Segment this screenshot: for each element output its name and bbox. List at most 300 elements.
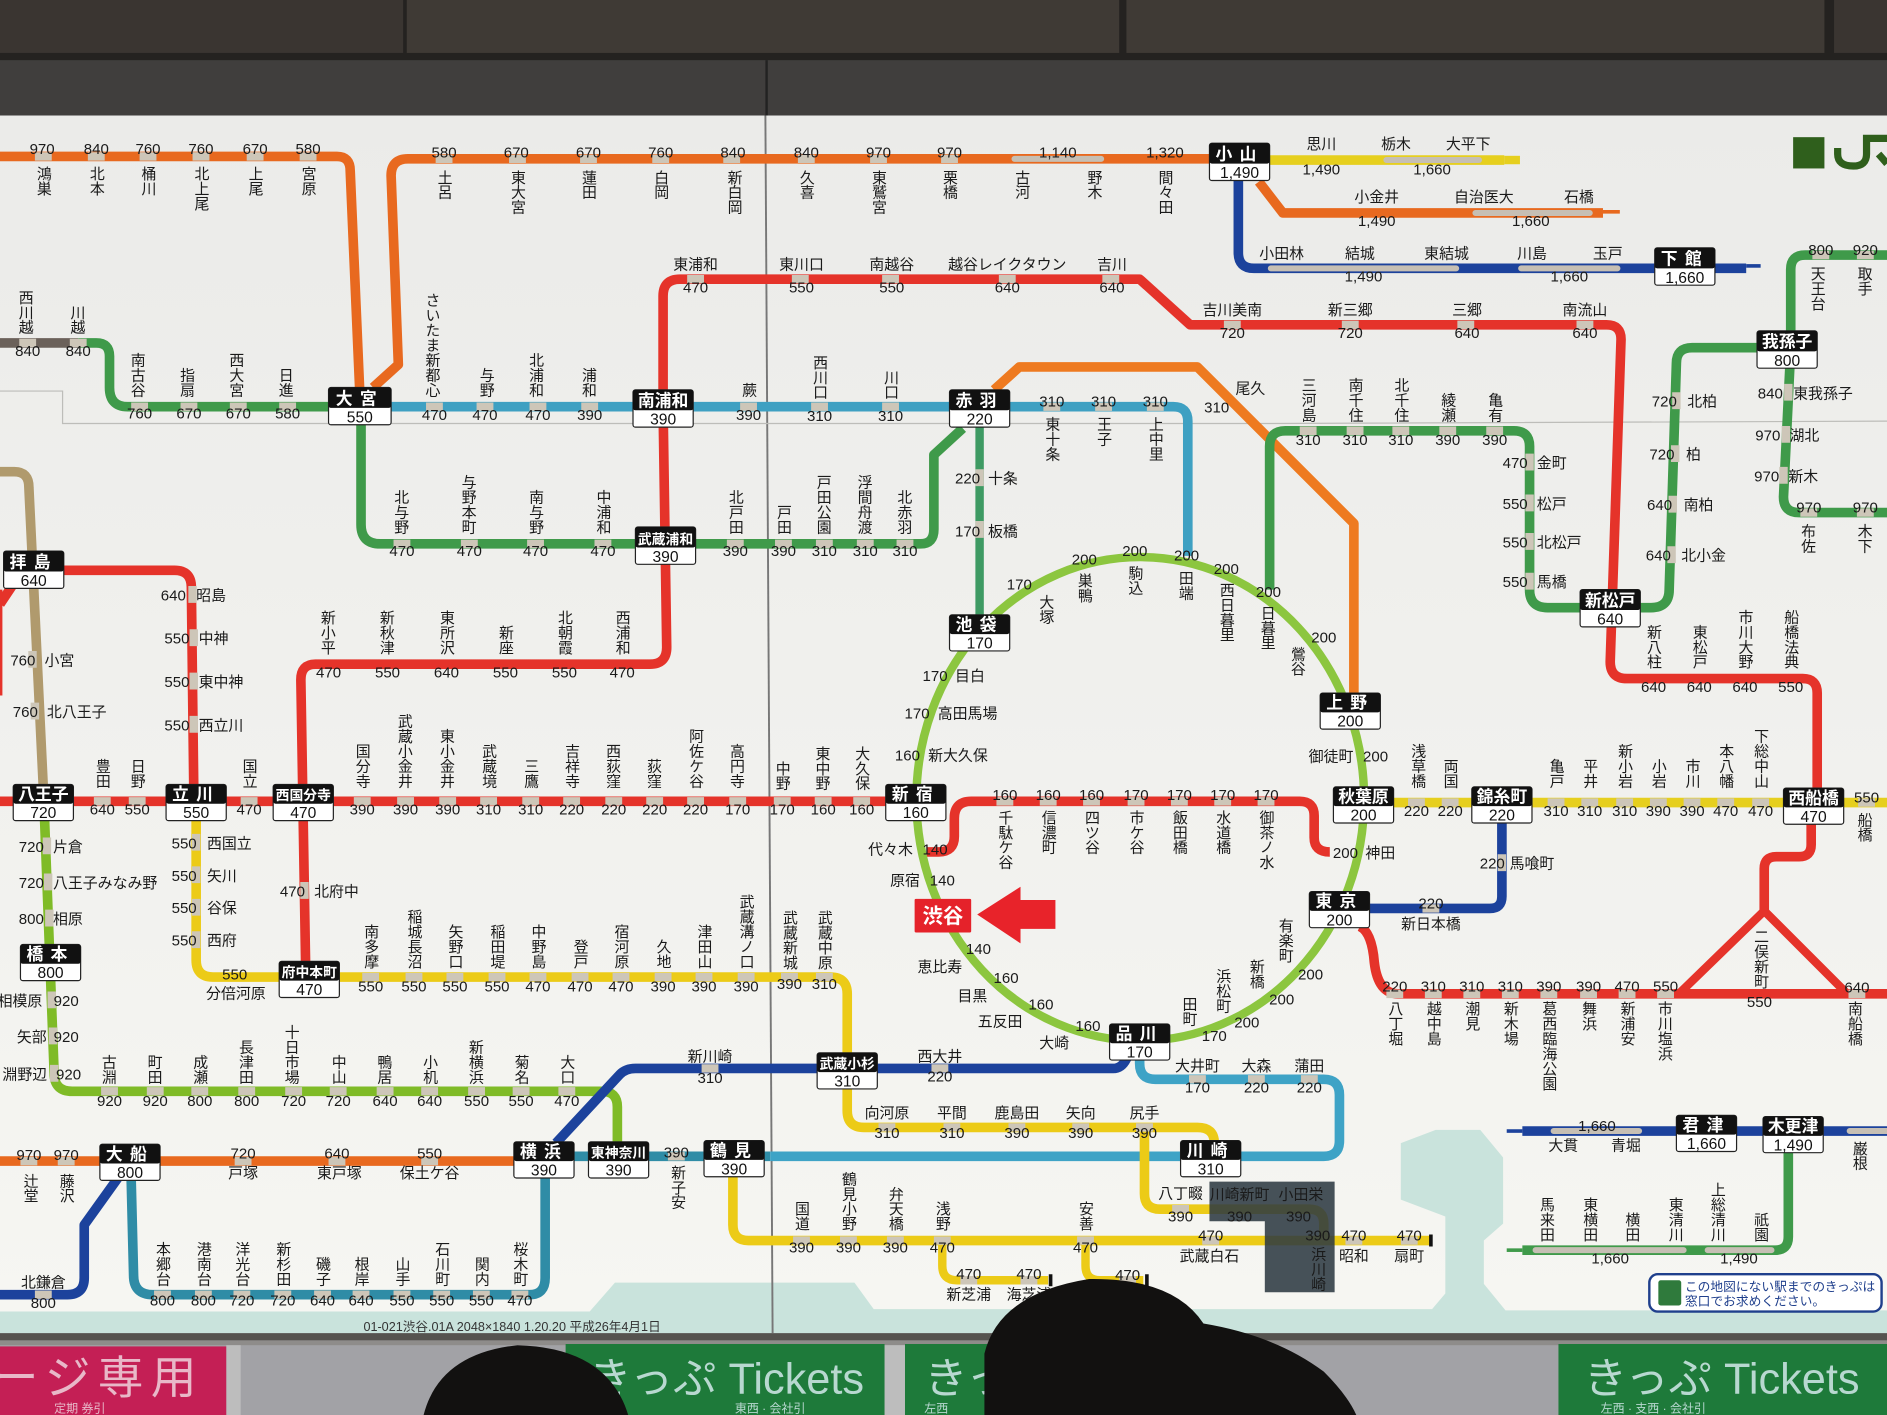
names: Sobu rapid: 馬喰町 bbox=[1510, 856, 1554, 873]
fares: Musashino south and Chuo: 160 bbox=[1079, 787, 1104, 804]
names: Musashino south and Chuo: 本八幡 bbox=[1717, 743, 1734, 788]
line: Keiyo bbox=[1360, 926, 1887, 994]
you-are-here: Shibuya sign bbox=[915, 899, 971, 933]
fares: 640 bbox=[310, 1293, 335, 1310]
names above lines: 中山 bbox=[330, 1054, 347, 1084]
fares: 640 bbox=[1844, 980, 1869, 997]
names: Ryomo, Mito, Mito branch: 川島 bbox=[1517, 246, 1547, 263]
heads in foreground bbox=[424, 1279, 1356, 1415]
fares: vertical stations: 970 bbox=[1796, 500, 1821, 517]
fares: 470 bbox=[930, 1240, 955, 1257]
fares: Musashino north: 550 bbox=[879, 279, 904, 296]
notice box: 窓口でお求めください。 bbox=[1685, 1294, 1825, 1309]
names: Musashino north bbox=[673, 257, 1607, 397]
names: west vertical: 片倉 bbox=[53, 839, 83, 856]
line: Keihin-Tohoku to Shinagawa bbox=[770, 1053, 1339, 1156]
fares: 310 bbox=[1459, 978, 1484, 995]
names horizontal bbox=[1548, 1137, 1641, 1154]
fares: Musashino south and Chuo: 550 bbox=[1778, 679, 1803, 696]
fares: 390 bbox=[1068, 1125, 1093, 1142]
station: Higashi-Kanagawa bbox=[588, 1142, 649, 1180]
line: Joban north bbox=[1784, 255, 1887, 513]
fares below lines: 840 bbox=[15, 343, 40, 360]
station: Haijima: 拝島 bbox=[10, 553, 58, 572]
fares: Musashino south and Chuo: 220 bbox=[1418, 895, 1443, 912]
station: Minami-Urawa: 南浦和 bbox=[638, 391, 688, 411]
fares: 470 bbox=[1073, 1240, 1098, 1257]
fares: Musashino south and Chuo: 160 bbox=[849, 802, 874, 819]
fares: 310 bbox=[1498, 978, 1523, 995]
names: Yamanote horizontal: 目白 bbox=[955, 668, 985, 685]
names above lines: 三河島 bbox=[1300, 378, 1317, 423]
names above lines bbox=[100, 894, 833, 1085]
fares: Musashino south and Chuo: 640 bbox=[434, 664, 459, 681]
names: Takasaki and Utsunomiya: 東大宮 bbox=[509, 170, 526, 215]
names: Yamanote horizontal: 御徒町 bbox=[1309, 749, 1353, 766]
names above lines: 南多摩 bbox=[362, 924, 379, 969]
arrow: pointing to Shibuya bbox=[977, 887, 1055, 943]
names horizontal: 大貫 bbox=[1548, 1137, 1578, 1154]
names: west vertical: 淵野辺 bbox=[2, 1066, 47, 1083]
names: vertical stations bbox=[988, 385, 1853, 591]
names above lines: 北与野 bbox=[392, 489, 409, 534]
names: Ryomo, Mito, Mito branch: 小田林 bbox=[1259, 246, 1304, 263]
names horizontal: 蒲田 bbox=[1294, 1058, 1324, 1075]
names: Takasaki and Utsunomiya: 東鷲宮 bbox=[870, 170, 887, 215]
fares: Musashino south and Chuo: 470 bbox=[1748, 803, 1773, 820]
fares: Yamanote: 170 bbox=[923, 668, 948, 685]
fares below lines: 390 bbox=[736, 407, 761, 424]
fares: Yamanote: 170 bbox=[904, 705, 930, 722]
fares: Takasaki: 840 bbox=[84, 141, 109, 158]
station: Hashimoto: 橋本 bbox=[26, 945, 75, 964]
names: Musashino north: 吉川 bbox=[1097, 257, 1127, 274]
names above Kururi: 祇園 bbox=[1752, 1212, 1769, 1242]
fares: west vertical: 800 bbox=[19, 911, 44, 928]
station: Shin-Matsudo: 新松戸 bbox=[1585, 591, 1635, 610]
fares: Yamanote: 200 bbox=[1333, 845, 1358, 862]
fares: 640 bbox=[417, 1093, 442, 1110]
fares: west vertical bbox=[10, 587, 305, 1083]
fares: 720 bbox=[270, 1293, 295, 1310]
names: Takasaki and Utsunomiya: 久喜 bbox=[798, 170, 815, 200]
fares: Musashino south and Chuo: 550 bbox=[552, 664, 577, 681]
fares: Musashino south and Chuo: 170 bbox=[1167, 787, 1192, 804]
names horizontal: 八丁畷 bbox=[1158, 1185, 1203, 1202]
station: Ofuna: 大船 bbox=[106, 1145, 154, 1164]
fares: vertical stations: 720 bbox=[1652, 394, 1677, 411]
fares: 550 bbox=[1747, 994, 1772, 1011]
names: Musashino south and Chuo: 下総中山 bbox=[1752, 728, 1769, 788]
names vertical: 巌根 bbox=[1851, 1141, 1868, 1171]
fares: west vertical: 760 bbox=[13, 704, 38, 721]
names below Akabane: 東十条 bbox=[1043, 416, 1060, 461]
names: west vertical: 西立川 bbox=[199, 717, 243, 734]
station: Kinshicho: 220 bbox=[1489, 808, 1515, 825]
names above lines: さいたま新都心 bbox=[424, 293, 441, 397]
fares: vertical stations: 800 bbox=[1808, 242, 1833, 259]
sign: green Tickets centre bbox=[566, 1344, 885, 1415]
fares: Yamanote: 200 bbox=[1234, 1015, 1259, 1032]
fares: 390 bbox=[1132, 1125, 1157, 1142]
station: Kinshicho bbox=[1472, 787, 1532, 825]
names horizontal: 武蔵白石 bbox=[1180, 1248, 1239, 1265]
names horizontal bbox=[206, 986, 1324, 1122]
fares: Musashino south and Chuo: 220 bbox=[1404, 803, 1429, 820]
names: Yamanote vertical: 大塚 bbox=[1037, 594, 1054, 625]
fares: west vertical: 550 bbox=[164, 674, 189, 691]
names above lines: 浦和 bbox=[580, 367, 597, 397]
names above lines: 長津田 bbox=[237, 1039, 254, 1084]
names: Musashino south and Chuo: 西荻窪 bbox=[604, 743, 621, 789]
fares: Takasaki: 670 bbox=[243, 141, 268, 158]
names: Musashino south and Chuo: 阿佐ケ谷 bbox=[687, 728, 704, 788]
fares: Musashino south and Chuo: 310 bbox=[1544, 803, 1569, 820]
station: Akabane bbox=[950, 390, 1010, 429]
names: Ryomo, Mito, Mito branch: 玉戸 bbox=[1593, 246, 1623, 263]
line: Futamata triangle bbox=[1679, 911, 1847, 994]
notice text: この地図にない駅までのきっぷは bbox=[1685, 1279, 1875, 1294]
sign: green Tickets right bbox=[1558, 1344, 1887, 1415]
names: Musashino south and Chuo: 市川大野 bbox=[1736, 609, 1753, 669]
names: Yamanote horizontal bbox=[868, 668, 1395, 1052]
names above lines: 戸田公園 bbox=[815, 475, 832, 534]
names above lines: 武蔵中原 bbox=[816, 910, 833, 970]
names: Yamanote vertical: 新橋 bbox=[1248, 959, 1265, 989]
fares: Musashino south and Chuo: 390 bbox=[1679, 803, 1705, 820]
names above lines: 北赤羽 bbox=[895, 489, 912, 534]
names: Musashino south and Chuo: 浅草橋 bbox=[1409, 743, 1426, 788]
names horizontal: 青堀 bbox=[1611, 1137, 1641, 1154]
names above lines: 川口 bbox=[882, 370, 899, 400]
names: Joban north: 天王台 bbox=[1809, 266, 1826, 311]
station: Haijima bbox=[4, 551, 64, 590]
station: Shimodate: 1,660 bbox=[1665, 270, 1705, 287]
station: Kawasaki bbox=[1181, 1141, 1241, 1178]
names: Ryomo, Mito, Mito branch bbox=[1259, 136, 1623, 263]
names above lines: 北戸田 bbox=[727, 489, 744, 534]
labels: Keiyo and Boso bbox=[1382, 929, 1869, 1267]
names above lines: 北浦和 bbox=[527, 352, 544, 397]
names: Yamanote vertical: 田端 bbox=[1177, 570, 1194, 600]
station: Tachikawa: 立川 bbox=[172, 785, 220, 804]
station: Tsurumi: 390 bbox=[721, 1161, 747, 1178]
fares below lines: 310 bbox=[807, 408, 832, 425]
names above lines: 亀有 bbox=[1486, 392, 1503, 424]
fares below lines: 470 bbox=[457, 543, 482, 560]
fares: Musashino south and Chuo: 170 bbox=[1210, 787, 1235, 804]
fares: Takasaki: 970 bbox=[937, 145, 962, 162]
fares: Takasaki: 760 bbox=[135, 141, 161, 158]
fares: Yamanote: 200 bbox=[1311, 630, 1336, 647]
names horizontal: 尻手 bbox=[1130, 1105, 1159, 1122]
names above lines: 綾瀬 bbox=[1439, 392, 1456, 423]
fares: 550 bbox=[464, 1093, 489, 1110]
fares: 390 bbox=[1004, 1125, 1029, 1142]
covered name vertical: 浜川崎 bbox=[1309, 1247, 1326, 1292]
fares: Musashino south and Chuo: 220 bbox=[1438, 803, 1463, 820]
fares: west vertical: 470 bbox=[280, 883, 305, 900]
names: vertical stations: 北小金 bbox=[1681, 548, 1726, 565]
names: Musashino south and Chuo: 新小平 bbox=[319, 610, 336, 655]
fares: Musashino south and Chuo: 220 bbox=[559, 802, 584, 819]
names vertical: 市川塩浜 bbox=[1656, 1001, 1673, 1061]
station: Shimodate: 下館 bbox=[1661, 250, 1709, 269]
names: west vertical: 東中神 bbox=[199, 674, 243, 691]
names: Musashino south and Chuo: 新小岩 bbox=[1616, 743, 1633, 788]
names above lines: 武蔵新城 bbox=[781, 910, 798, 971]
line: Sobu bbox=[1384, 799, 1887, 807]
station: Shin-Matsudo bbox=[1580, 590, 1640, 628]
fares: vertical stations: 170 bbox=[955, 524, 980, 541]
names: Musashino south and Chuo: 武蔵境 bbox=[480, 743, 497, 789]
fares: Takasaki: 580 bbox=[296, 141, 321, 158]
names: Yamanote horizontal: 原宿 bbox=[890, 873, 920, 890]
names above lines bbox=[17, 290, 1503, 534]
names: Musashino south and Chuo: 両国 bbox=[1442, 758, 1459, 788]
names: vertical stations: 松戸 bbox=[1537, 496, 1567, 513]
station: Nishi-Funabashi: 470 bbox=[1801, 809, 1827, 826]
station: Shinjuku bbox=[886, 784, 946, 822]
names: west vertical: 谷保 bbox=[207, 900, 237, 917]
fares: Musashino south and Chuo: 310 bbox=[1577, 803, 1602, 820]
fares below lines: 840 bbox=[66, 343, 91, 360]
covered names bbox=[1210, 1187, 1323, 1204]
fares: vertical stations: 220 bbox=[955, 471, 980, 488]
names: Ryomo, Mito, Mito branch: 結城 bbox=[1345, 246, 1375, 263]
station: Kawasaki: 310 bbox=[1198, 1161, 1224, 1178]
line: Umi-Shibaura branch bbox=[942, 1241, 1048, 1280]
station: Shinagawa: 品川 bbox=[1116, 1025, 1164, 1044]
names: west vertical: 西国立 bbox=[207, 835, 252, 852]
names horizontal: 平間 bbox=[937, 1105, 967, 1122]
names: inner Chuo: 水道橋 bbox=[1214, 810, 1231, 855]
names: Takasaki and Utsunomiya bbox=[35, 166, 1173, 216]
names: Takasaki and Utsunomiya: 土呂 bbox=[436, 170, 453, 200]
fares below lines: 470 bbox=[389, 543, 414, 560]
fares: Musashino south and Chuo: 170 bbox=[1124, 787, 1149, 804]
station: Ikebukuro: 170 bbox=[967, 636, 993, 653]
fares: west vertical: 920 bbox=[54, 993, 79, 1010]
names: Yamanote vertical: 西日暮里 bbox=[1218, 582, 1235, 642]
fares: 220 bbox=[1297, 1080, 1322, 1097]
fares: 470 bbox=[1615, 978, 1640, 995]
names above lines: 浮間舟渡 bbox=[856, 475, 873, 534]
fares below lines: 390 bbox=[1435, 432, 1460, 449]
station: Fuchu-Hommachi bbox=[279, 961, 339, 999]
you-are-here: Shibuya sign: 渋谷 bbox=[922, 905, 963, 928]
station: Tokyo: 200 bbox=[1326, 912, 1353, 929]
fares: Musashino south and Chuo: 390 bbox=[435, 802, 460, 819]
fares: Yamanote: 170 bbox=[1007, 577, 1032, 594]
names: Ryomo, Mito, Mito branch: 東結城 bbox=[1424, 246, 1469, 263]
fares: 550 bbox=[401, 978, 427, 995]
station: Shin-Matsudo: 640 bbox=[1597, 611, 1624, 628]
names horizontal: 鹿島田 bbox=[995, 1105, 1039, 1122]
station: Nishi-Kokubunji: 470 bbox=[290, 805, 317, 822]
fares: Musashino north: 640 bbox=[1454, 325, 1480, 342]
station: Shinagawa bbox=[1110, 1024, 1170, 1062]
station: Ikebukuro bbox=[950, 615, 1010, 653]
line: Chuo west bbox=[0, 797, 891, 805]
fares: 800 bbox=[31, 1295, 56, 1312]
names above lines: 中野島 bbox=[529, 924, 546, 969]
names: Takasaki and Utsunomiya: 北上尾 bbox=[192, 166, 209, 212]
fares: Yamanote: 170 bbox=[1202, 1028, 1227, 1045]
names above lines: 与野 bbox=[478, 367, 495, 397]
names: west vertical: 矢部 bbox=[17, 1029, 47, 1046]
fare markers on vertical lines bbox=[32, 384, 1788, 1082]
names: Musashino south and Chuo: 新座 bbox=[497, 625, 514, 655]
fares: Yamanote bbox=[895, 543, 1388, 1045]
names: Musashino south and Chuo: 東中野 bbox=[813, 746, 830, 791]
names horizontal: 東戸塚 bbox=[317, 1165, 362, 1182]
names: vertical stations: 柏 bbox=[1686, 447, 1701, 464]
fares below lines: 310 bbox=[1143, 394, 1168, 411]
fares: Musashino south and Chuo: 640 bbox=[1641, 679, 1666, 696]
fares: west vertical: 640 bbox=[161, 587, 186, 604]
names above lines: 指扇 bbox=[178, 367, 195, 397]
line: Keihin-Tohoku north bbox=[385, 407, 1188, 556]
names: inner Chuo: 船橋 bbox=[1856, 812, 1873, 842]
fares: Oyama branches: 1,490 bbox=[1345, 269, 1382, 286]
line: Saikyo north bbox=[361, 421, 963, 544]
names: Takasaki and Utsunomiya: 桶川 bbox=[140, 166, 157, 196]
names above lines: 南古谷 bbox=[129, 352, 146, 397]
fares below lines: 470 bbox=[525, 407, 550, 424]
fares: Musashino south and Chuo: 310 bbox=[518, 802, 543, 819]
line: Sobu rapid bbox=[1366, 818, 1502, 908]
fares: Musashino north: 550 bbox=[789, 279, 814, 296]
names: Sobu rapid: 新日本橋 bbox=[1401, 916, 1461, 933]
station: Omiya bbox=[329, 387, 391, 426]
fares: Yamanote: 200 bbox=[1298, 966, 1323, 983]
fares: Takasaki bbox=[30, 141, 1184, 162]
names: Musashino south and Chuo: 日野 bbox=[129, 758, 146, 788]
names: Yamanote vertical bbox=[1037, 566, 1306, 1026]
names: Takasaki and Utsunomiya: 栗橋 bbox=[941, 170, 958, 200]
station: Higashi-Kanagawa: 390 bbox=[606, 1163, 632, 1180]
names above lines: 与野本町 bbox=[460, 475, 477, 534]
names below Akabane: 王子 bbox=[1095, 416, 1112, 447]
labels: Musashino north bbox=[673, 257, 1607, 417]
names: Musashino north: 三郷 bbox=[1452, 302, 1482, 319]
names above lines: 十日市場 bbox=[283, 1024, 300, 1084]
names above lines: 西大宮 bbox=[227, 352, 244, 397]
names vertical: 舞浜 bbox=[1580, 1001, 1597, 1031]
line: Tsurumi bbox=[733, 1173, 1431, 1241]
station: Shinjuku: 160 bbox=[903, 805, 929, 822]
names below Akabane: 上中里 bbox=[1147, 416, 1164, 461]
line: Mito Oyama branch bbox=[1238, 180, 1746, 268]
names horizontal: 新芝浦 bbox=[946, 1286, 991, 1303]
fares below lines: 310 bbox=[1039, 394, 1064, 411]
names above lines: 津田山 bbox=[696, 924, 713, 969]
fares: Musashino south and Chuo: 390 bbox=[350, 802, 375, 819]
fares: 310 bbox=[1421, 978, 1446, 995]
names above Kururi: 横田 bbox=[1623, 1212, 1640, 1242]
fares: Oyama branches bbox=[1303, 161, 1588, 286]
fares: Takasaki: 840 bbox=[794, 145, 819, 162]
names: vertical stations: 新木 bbox=[1788, 468, 1818, 485]
names: west vertical bbox=[0, 587, 359, 1083]
names: Musashino south and Chuo: 豊田 bbox=[94, 758, 111, 788]
fares: 470 bbox=[956, 1266, 981, 1283]
names horizontal: 大森 bbox=[1241, 1058, 1271, 1075]
names: Yamanote horizontal: 大崎 bbox=[1039, 1035, 1069, 1052]
names: inner Chuo: 信濃町 bbox=[1040, 810, 1057, 855]
names: west vertical: 北八王子 bbox=[47, 704, 107, 721]
line: Nambu branch bbox=[1144, 1127, 1324, 1241]
names: Takasaki and Utsunomiya: 間々田 bbox=[1156, 170, 1173, 215]
station: Minami-Urawa: 390 bbox=[650, 412, 676, 429]
fares: Takasaki: 760 bbox=[188, 141, 214, 158]
station: Fuchu-Hommachi: 470 bbox=[296, 982, 323, 999]
fares below lines: 310 bbox=[1296, 432, 1321, 449]
fares: 390 bbox=[691, 978, 717, 995]
fares: west vertical: 760 bbox=[10, 652, 35, 669]
names: inner Chuo: 飯田橋 bbox=[1171, 810, 1188, 855]
fares below lines: 470 bbox=[472, 407, 498, 424]
fares: vertical stations: 550 bbox=[1503, 496, 1528, 513]
station: Shinjuku: 新宿 bbox=[892, 784, 940, 804]
station: Oyama: 小山 bbox=[1215, 145, 1264, 164]
fares: 470 bbox=[525, 978, 550, 995]
names horizontal: 保土ケ谷 bbox=[400, 1165, 460, 1182]
fares: 550 bbox=[417, 1146, 442, 1163]
names: vertical stations: 南柏 bbox=[1684, 497, 1713, 514]
names: Musashino north: 新三郷 bbox=[1328, 302, 1373, 319]
names above lines: 日進 bbox=[277, 367, 294, 397]
fares: 220 bbox=[1244, 1080, 1269, 1097]
fares: 390 bbox=[1576, 978, 1601, 995]
names: vertical stations: 東我孫子 bbox=[1793, 385, 1853, 402]
fares below lines: 670 bbox=[226, 406, 251, 423]
station: Omiya: 大宮 bbox=[336, 389, 384, 408]
names horizontal: 昭和 bbox=[1339, 1248, 1369, 1265]
fares: Musashino south and Chuo: 220 bbox=[1480, 856, 1505, 873]
fares: 470 bbox=[1115, 1267, 1140, 1284]
fares bbox=[16, 1145, 1422, 1312]
fares: 470 bbox=[568, 978, 593, 995]
names horizontal: 戸塚 bbox=[228, 1165, 258, 1182]
names: Yamanote horizontal: 代々木 bbox=[868, 841, 913, 858]
fares: Musashino south and Chuo: 550 bbox=[493, 664, 518, 681]
names vertical end: 桜木町 bbox=[511, 1241, 528, 1286]
station: Kawasaki: 川崎 bbox=[1187, 1141, 1235, 1160]
names vertical: 新木場 bbox=[1502, 1001, 1519, 1046]
names: Joban north: 木下 bbox=[1856, 523, 1873, 553]
station: Ofuna: 800 bbox=[117, 1165, 143, 1182]
station: Tokyo: 東京 bbox=[1315, 892, 1363, 911]
fares: west vertical: 550 bbox=[172, 835, 197, 852]
station: Fuchu-Hommachi: 府中本町 bbox=[282, 964, 337, 980]
fares: 470 bbox=[1016, 1266, 1041, 1283]
station: Musashi-Kosugi: 武蔵小杉 bbox=[820, 1055, 875, 1071]
names: Yamanote vertical: 日暮里 bbox=[1259, 605, 1276, 650]
line: Musashino south bbox=[301, 409, 667, 969]
line: Akabane to Ikebukuro bbox=[976, 421, 983, 620]
names: west vertical: 昭島 bbox=[196, 587, 226, 604]
names: Musashino south and Chuo: 中野 bbox=[774, 761, 791, 791]
names: Musashino south and Chuo: 東所沢 bbox=[438, 610, 455, 655]
names above lines: 中浦和 bbox=[594, 489, 611, 534]
line: Yamanote loop bbox=[916, 557, 1364, 1041]
fares: Musashino south and Chuo: 160 bbox=[811, 802, 836, 819]
names vertical end: 国道 bbox=[793, 1201, 810, 1231]
names above Kururi: 上総清川 bbox=[1709, 1182, 1726, 1242]
fares: 970 bbox=[54, 1147, 79, 1164]
